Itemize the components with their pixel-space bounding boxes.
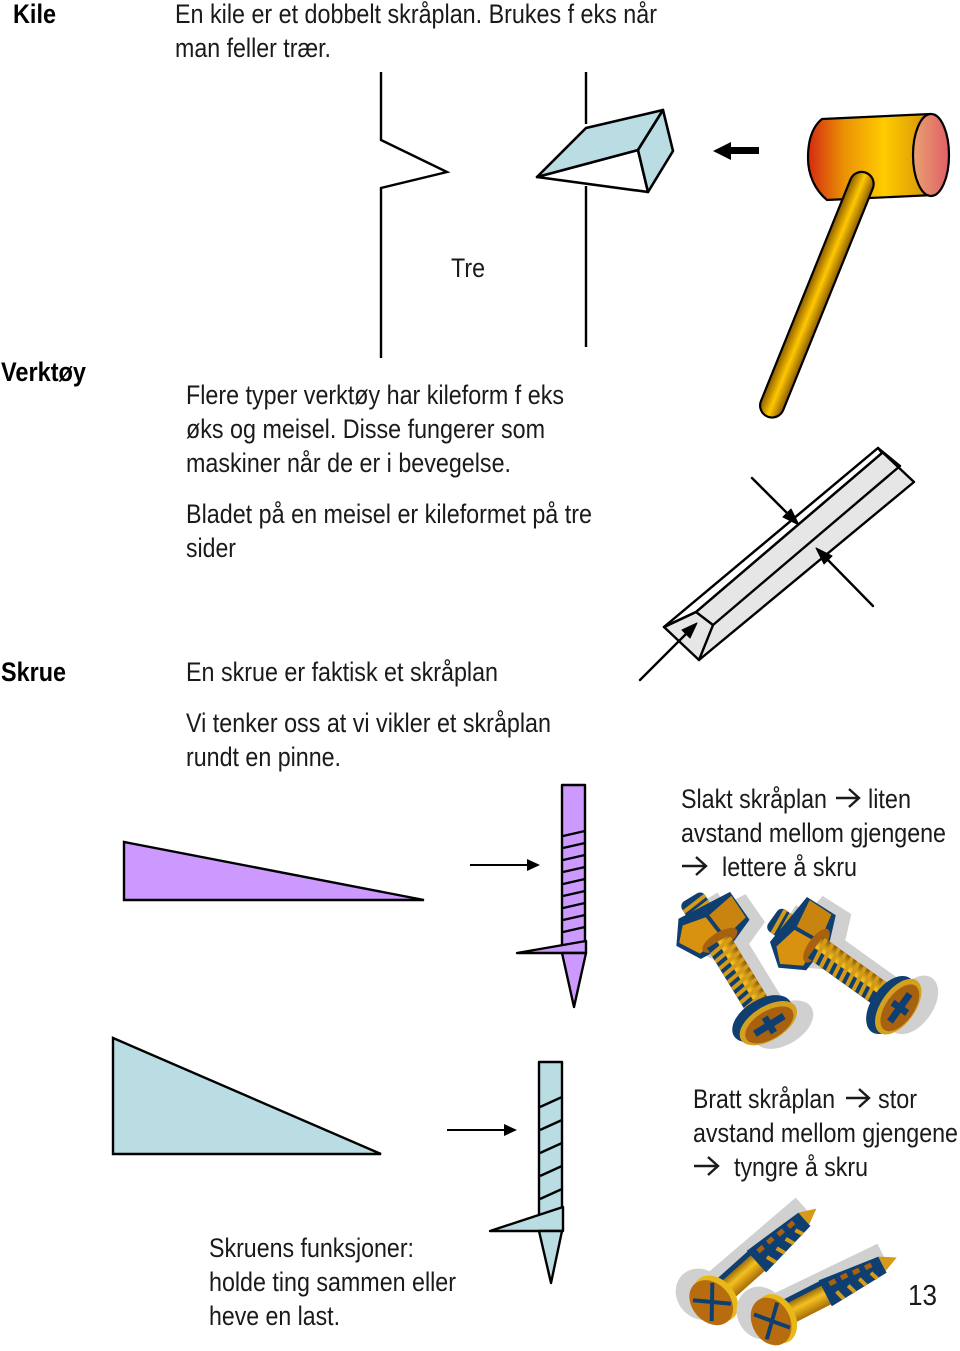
- purple inclined plane: [124, 842, 424, 900]
- wood split line left: [381, 72, 447, 358]
- blue inclined plane: [113, 1038, 381, 1154]
- text: skruens funksjoner: Skruens funksjoner:: [209, 1233, 414, 1263]
- arrow: chisel tip: [640, 623, 697, 680]
- purple screw: [517, 785, 586, 1007]
- icon: bolt right: [751, 878, 951, 1056]
- text: kile description: man feller trær.: [175, 33, 331, 63]
- heading: Skrue: Skrue: [1, 657, 66, 687]
- text: meisel description: Bladet på en meisel er kileformet på tre: [186, 499, 592, 529]
- label: Tre: Tre: [451, 253, 485, 283]
- arrow: chisel bottom: [816, 548, 873, 606]
- text: verktøy description: øks og meisel. Disse fungerer som: [186, 414, 545, 444]
- text: skruens funksjoner: [209, 1233, 456, 1331]
- text: bratt skråplan: Bratt skråplan: [693, 1084, 835, 1114]
- page number: 13: [908, 1280, 937, 1312]
- text: meisel description: sider: [186, 533, 236, 563]
- wood line right: [585, 72, 587, 347]
- heading: Verktøy: Verktøy: [1, 357, 86, 387]
- text: skruens funksjoner: holde ting sammen eller: [209, 1267, 456, 1297]
- text: bratt skråplan: [693, 1084, 958, 1182]
- text: verktøy description: [186, 380, 564, 478]
- wedge: [537, 110, 673, 192]
- chisel diagram: [640, 448, 914, 680]
- text: slakt skråplan: liten: [868, 784, 911, 814]
- text: skrue explanation: [186, 708, 551, 772]
- arrow: purple: [470, 859, 540, 871]
- icon: bolt left: [659, 871, 826, 1068]
- text: bratt skråplan: stor: [878, 1084, 917, 1114]
- text: skrue intro: En skrue er faktisk et skråplan: [186, 657, 498, 687]
- text: bratt skråplan: tyngre å skru: [734, 1152, 868, 1182]
- text: verktøy description: Flere typer verktøy har kileform f eks: [186, 380, 564, 410]
- icon: wood screw left: [665, 1179, 834, 1339]
- arrow: hammer direction: [713, 142, 759, 160]
- arrow: chisel top: [752, 478, 799, 525]
- icon: hammer: [756, 114, 949, 421]
- text: meisel description: [186, 499, 592, 563]
- text: verktøy description: maskiner når de er i bevegelse.: [186, 448, 511, 478]
- icon: wood screw right: [728, 1223, 909, 1351]
- arrow: blue: [447, 1124, 517, 1136]
- text: skruens funksjoner: heve en last.: [209, 1301, 340, 1331]
- text: slakt skråplan: Slakt skråplan: [681, 784, 827, 814]
- text: slakt skråplan: [681, 784, 946, 882]
- text: kile description: [175, 0, 657, 63]
- text: skrue explanation: rundt en pinne.: [186, 742, 341, 772]
- text: slakt skråplan: lettere å skru: [722, 852, 857, 882]
- text: skrue explanation: Vi tenker oss at vi vikler et skråplan: [186, 708, 551, 738]
- blue screw: [490, 1062, 563, 1283]
